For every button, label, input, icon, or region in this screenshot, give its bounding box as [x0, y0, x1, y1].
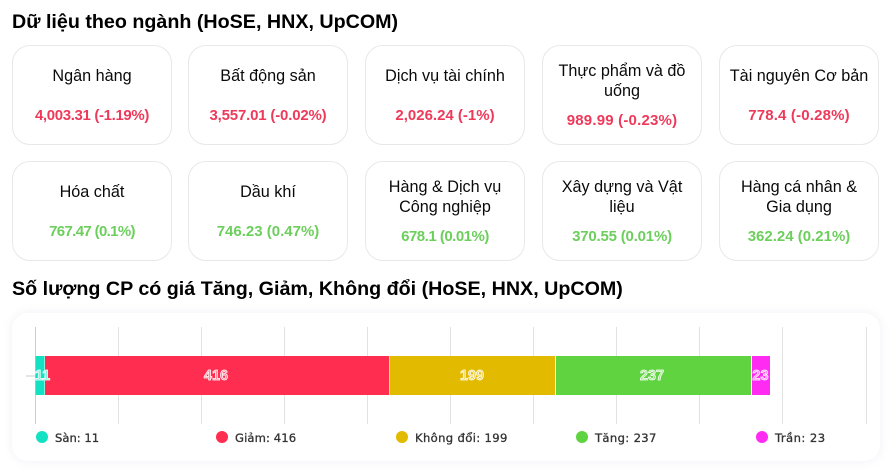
card: Hóa chất — [12, 161, 172, 261]
legend: Sàn — [36, 431, 99, 445]
card: Bất động sản: 3,557.01 (-0.02%) — [209, 106, 326, 124]
bar value labels — [35, 368, 769, 384]
bar value labels: 23 — [752, 368, 769, 384]
bar segment: Tăng — [556, 356, 751, 395]
card: Hàng cá nhân & Gia dụng — [719, 161, 879, 261]
card: Hàng cá nhân & Gia dụng: Gia dụng — [766, 198, 832, 216]
card: Hàng & Dịch vụ Công nghiệp — [365, 161, 525, 261]
bar value labels: 11 — [35, 368, 50, 384]
card: Hàng & Dịch vụ Công nghiệp: Hàng & Dịch vụ — [389, 178, 501, 196]
card: Hàng cá nhân & Gia dụng: 362.24 (0.21%) — [748, 228, 850, 245]
card: Xây dựng và Vật liệu: Xây dựng và Vật — [562, 178, 682, 196]
bar segment: Trần — [752, 356, 770, 395]
card: Thực phẩm và đồ uống: uống — [604, 82, 640, 100]
legend — [36, 431, 826, 445]
card: Ngân hàng — [12, 45, 172, 145]
card: Hóa chất: Hóa chất — [60, 183, 124, 201]
panel: stock count chart — [12, 313, 880, 461]
card: Ngân hàng: Ngân hàng — [52, 67, 132, 85]
card: Dịch vụ tài chính — [365, 45, 525, 145]
legend: Không đổi: Không đổi: 199 — [415, 431, 508, 445]
heading: sector data: Dữ liệu theo ngành (HoSE, HNX, UpCOM) — [12, 11, 398, 33]
card: Tài nguyên Cơ bản: Tài nguyên Cơ bản — [730, 67, 868, 85]
panel: sector cards — [12, 45, 879, 261]
card: Bất động sản: Bất động sản — [220, 67, 316, 85]
bar segment: Giảm — [45, 356, 389, 395]
card: Tài nguyên Cơ bản: 778.4 (-0.28%) — [748, 106, 850, 124]
card: Thực phẩm và đồ uống — [542, 45, 702, 145]
card: Dầu khí: Dầu khí — [240, 183, 296, 201]
card: Hàng & Dịch vụ Công nghiệp: Công nghiệp — [399, 198, 491, 216]
bar segment: Sàn — [36, 356, 44, 395]
card: Hàng & Dịch vụ Công nghiệp: 678.1 (0.01%) — [401, 228, 489, 245]
card: Tài nguyên Cơ bản — [719, 45, 879, 145]
bar segment: Không đổi — [390, 356, 555, 395]
legend: Sàn: Sàn: 11 — [55, 431, 99, 445]
card: Thực phẩm và đồ uống: 989.99 (-0.23%) — [567, 112, 677, 129]
card: Ngân hàng: 4,003.31 (-1.19%) — [35, 106, 149, 124]
bar value labels: 416 — [204, 368, 228, 384]
card: Xây dựng và Vật liệu: liệu — [609, 198, 635, 216]
card: Dịch vụ tài chính: Dịch vụ tài chính — [385, 67, 505, 85]
bar value labels: 199 — [460, 368, 484, 384]
card: Bất động sản — [188, 45, 348, 145]
card: Xây dựng và Vật liệu: 370.55 (0.01%) — [572, 228, 672, 245]
card: Dịch vụ tài chính: 2,026.24 (-1%) — [395, 106, 495, 124]
card: Dầu khí — [188, 161, 348, 261]
legend: Tăng: Tăng: 237 — [594, 431, 657, 445]
card: Dầu khí: 746.23 (0.47%) — [217, 222, 319, 240]
card: Hàng cá nhân & Gia dụng: Hàng cá nhân & — [741, 178, 857, 196]
card: Xây dựng và Vật liệu — [542, 161, 702, 261]
bar value labels: 237 — [640, 368, 664, 384]
card: Hóa chất: 767.47 (0.1%) — [49, 222, 135, 240]
legend: Giảm: Giảm: 416 — [235, 431, 296, 445]
card: Thực phẩm và đồ uống: Thực phẩm và đồ — [559, 62, 685, 80]
heading: stock counts: Số lượng CP có giá Tăng, Giảm, Không đổi (HoSE, HNX, UpCOM) — [12, 278, 623, 300]
legend: Trần: Trần: 23 — [774, 431, 826, 445]
